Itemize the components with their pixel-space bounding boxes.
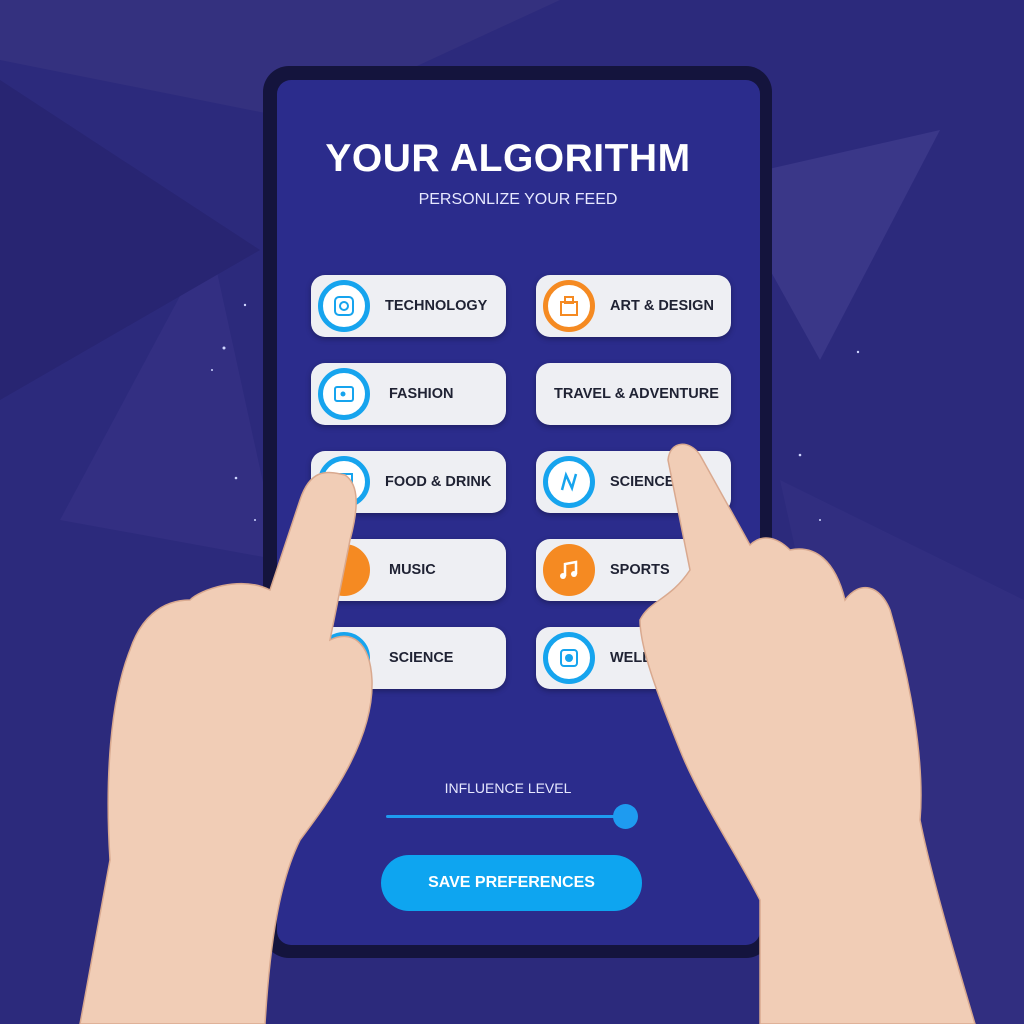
button: travel: TRAVEL & ADVENTURE [554,386,719,402]
button: food & drink: FOOD & DRINK [385,474,491,490]
button: music: MUSIC [389,562,436,578]
button: technology: TECHNOLOGY [385,298,487,314]
subtitle: PERSONLIZE YOUR FEED [419,191,617,208]
button: music [311,539,506,601]
button: wellness [536,627,731,689]
save button [381,855,642,911]
button: science [536,451,731,513]
title: YOUR ALGORITHM [325,137,691,180]
button: science: SCIENCE [610,474,674,490]
button: fashion: FASHION [389,386,453,402]
right hand [640,444,975,1024]
slider label: INFLUENCE LEVEL [445,780,571,796]
left hand [80,473,372,1024]
button grid [308,274,734,694]
button: sports [536,539,731,601]
button: travel [536,363,731,425]
button: science 2: SCIENCE [389,650,453,666]
button: technology [311,275,506,337]
tablet [263,66,772,958]
button: food & drink [311,451,506,513]
button: wellness: WELLNESS [610,650,691,666]
button: art & design [536,275,731,337]
button: science 2 [311,627,506,689]
button: sports: SPORTS [610,562,670,578]
screen [277,80,760,945]
button: art & design: ART & DESIGN [610,298,714,314]
slider [386,804,638,829]
save button: SAVE PREFERENCES [428,874,595,891]
button: fashion [311,363,506,425]
